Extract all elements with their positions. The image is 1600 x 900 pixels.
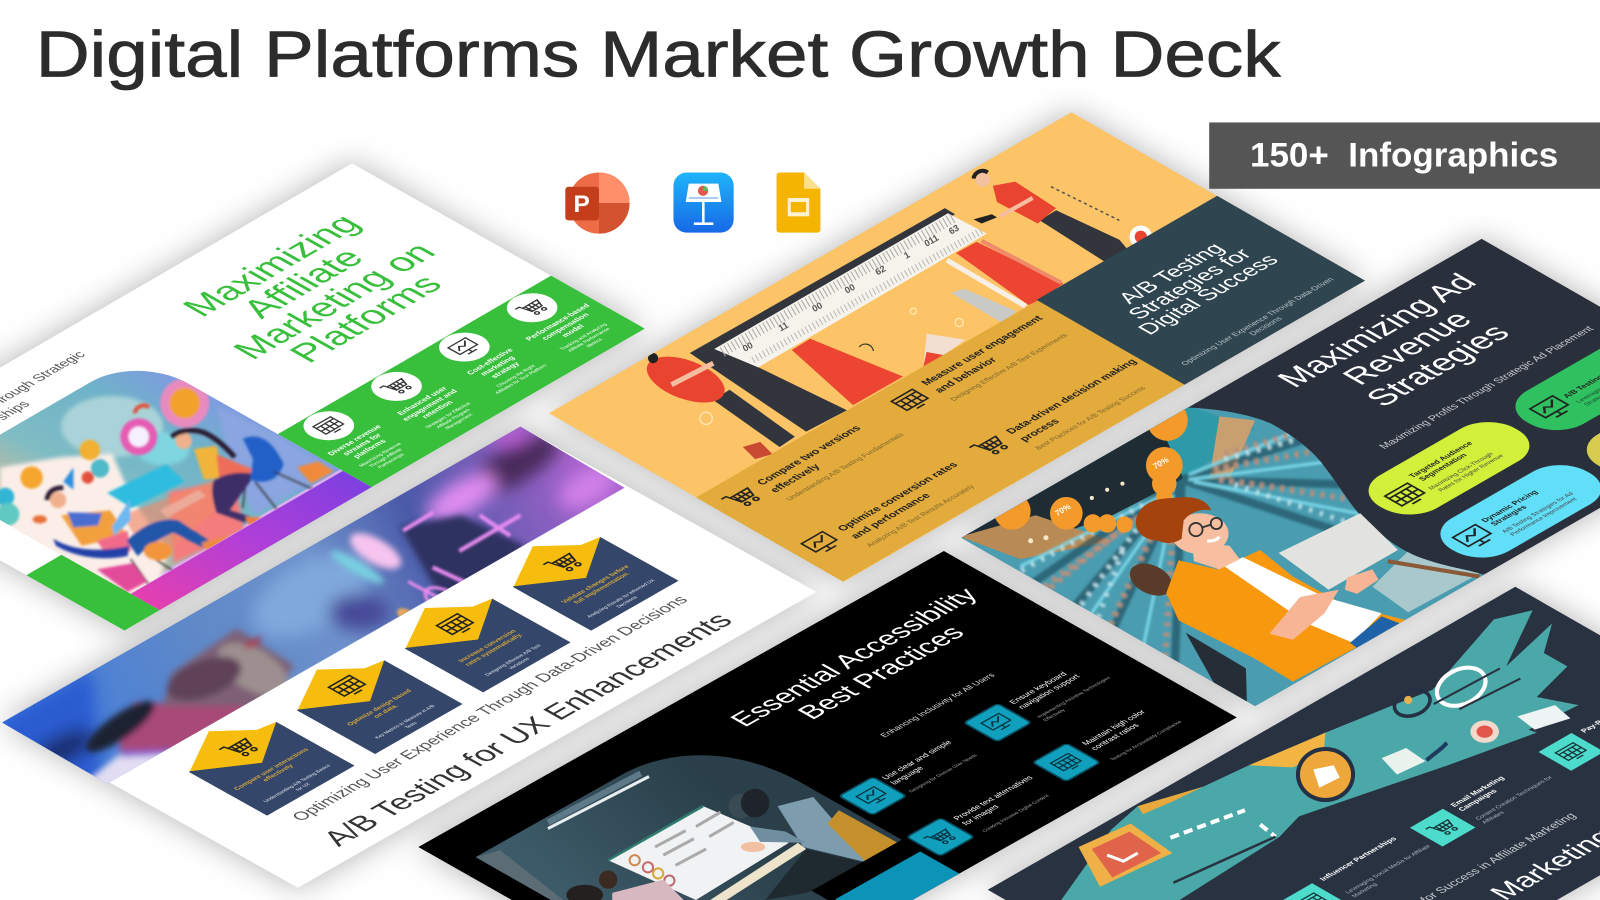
slide text and icons (1277, 704, 1600, 900)
heading: Affiliate (233, 243, 373, 323)
card: performance-based: Performance-based (523, 302, 592, 342)
pill: dynamic pricing: Strategies (1488, 504, 1530, 527)
teal corner block (835, 851, 959, 900)
heading: Platforms (280, 269, 451, 368)
ruler and figures illustration: 62 (874, 263, 887, 277)
item: email marketing (1408, 761, 1561, 848)
heading: Digital Success (1132, 251, 1284, 338)
slide background (2, 427, 816, 888)
card: performance-based: Metrics (585, 337, 605, 349)
panel: Maximizing Ad Revenue slide (949, 239, 1600, 714)
item: data-driven decisions: Best Practices for A/B Testing Success (1033, 385, 1148, 451)
card: diverse revenue: streams for (340, 432, 384, 457)
item: alt text: for images (960, 803, 1001, 827)
pill: targeted audience: Maximizing Click-Through (1427, 451, 1496, 491)
ruler and figures illustration: 00 (843, 282, 857, 296)
item: measure engagement: Measure user engagement (919, 314, 1046, 387)
item: keyboard navigation: Ensure keyboard (1007, 671, 1069, 705)
item: influencer partnerships: Influencer Partnerships (1318, 835, 1399, 882)
heading: Maximizing Ad (1269, 268, 1484, 392)
pill: yellow (1586, 433, 1600, 466)
pill: targeted audience: Targeted Audience (1407, 440, 1475, 479)
card: enhanced engagement: Strategies for Effective (424, 401, 473, 430)
card: performance-based: Affiliate Performance (567, 327, 612, 353)
item: optimize conversion: and performance (848, 491, 934, 541)
ruler and figures illustration (641, 171, 1152, 459)
card 1: Understanding A/B Testing Basics (262, 764, 333, 804)
lanterns (994, 400, 1188, 533)
photo: warehouse background (961, 408, 1484, 706)
item: compare versions: Understanding A/B Testing Fundamentals (783, 431, 906, 502)
teal brush illustration (1061, 610, 1579, 900)
card 3: rates systematically. (464, 632, 525, 667)
item: compare versions (720, 426, 904, 506)
right figure (1040, 210, 1126, 262)
card 3: Variations (507, 657, 532, 671)
icon: PowerPoint: P (573, 191, 590, 218)
slide panels and text (695, 196, 1365, 582)
lanterns: 70% (1152, 455, 1171, 471)
card: enhanced engagement (371, 372, 473, 430)
panel: A/B Testing Strategies slide (549, 112, 1365, 582)
photo: shelves converging (1019, 432, 1359, 663)
pill: dynamic pricing: Dynamic Pricing (1479, 489, 1540, 524)
card 4: full implementation. (572, 571, 632, 605)
item: email marketing: Affiliates (1481, 811, 1506, 825)
pill: targeted audience (1368, 422, 1530, 514)
card: cost-effective (439, 332, 547, 394)
card 2: Optimize design based (346, 688, 414, 727)
heading: Maximizing (174, 209, 369, 322)
card: diverse revenue: Through Affiliate (368, 447, 404, 468)
item: influencer partnerships (1277, 829, 1440, 900)
item: clear language: language (889, 765, 926, 786)
title: Digital Platforms Market Growth Deck (36, 18, 1281, 91)
slide background (988, 587, 1600, 900)
photo: man looking at neon screens (0, 418, 633, 867)
item: alt text: Creating Inclusive Digital Content (981, 794, 1052, 833)
heading: Strategies (1357, 319, 1517, 411)
card: cost-effective: Affiliates for Your Platform (494, 363, 549, 395)
pill: dynamic pricing (1440, 465, 1600, 558)
item: keyboard navigation (964, 659, 1119, 746)
card 1: for UX (295, 782, 313, 792)
card: cost-effective: Choosing the Right (495, 364, 538, 388)
pill: targeted audience: Segmentation (1417, 452, 1469, 482)
item: measure engagement: Designing Effective A/B Test Experiments (948, 332, 1070, 402)
card: enhanced engagement: Management (444, 413, 475, 431)
card: diverse revenue: Maximizing Revenue (358, 442, 403, 468)
item: data-driven decisions: process (1017, 417, 1063, 443)
item: optimize conversion (800, 463, 974, 553)
card: enhanced engagement: Enhanced user (395, 385, 449, 416)
heading: Strategies for (1122, 245, 1257, 323)
item: clear language (839, 736, 980, 816)
slide flat panels (0, 163, 645, 631)
item: compare versions: Compare two versions (754, 424, 864, 487)
item: clear language: Use clear and simple (880, 739, 954, 781)
ruler and figures illustration: 00 (741, 340, 755, 354)
card: enhanced engagement: engagement and (400, 388, 460, 422)
item: influencer partnerships: Marketing (1351, 882, 1379, 899)
card: cost-effective: strategy (488, 360, 522, 380)
slide flat panels (961, 239, 1600, 706)
card 2: Tests (404, 721, 419, 730)
card: diverse revenue: platforms (351, 438, 388, 459)
item: alt text (907, 772, 1059, 858)
card: performance-based: compensation (539, 311, 591, 341)
card 1 (188, 722, 354, 816)
photo: meeting around a board (408, 735, 980, 900)
item: influencer partnerships: Leveraging Social Media for Affiliate (1345, 844, 1433, 895)
panel: Essential Accessibility slide (408, 551, 1237, 900)
item: email marketing: Campaigns (1456, 788, 1499, 813)
card 1: effectively (261, 763, 296, 783)
pill: A/B testing (1516, 348, 1600, 430)
item: contrast ratios: contrast ratios (1089, 722, 1141, 752)
man with tablet (1136, 497, 1407, 704)
ruler and figures illustration: 63 (947, 223, 961, 236)
heading: Best Practices (790, 621, 971, 723)
photo: ceiling and side structures (960, 406, 1480, 612)
card: performance-based: Tracking and Analyzing (559, 322, 609, 351)
item: optimize conversion: Optimize conversion rates (835, 461, 961, 533)
card: performance-based (506, 293, 610, 352)
ruler and figures illustration: 11 (777, 320, 790, 333)
card: cost-effective: Cost-effective (464, 347, 515, 376)
pill: dynamic pricing: A/B Testing Strategies for Ad (1501, 491, 1576, 534)
item: data-driven decisions: Data-driven decision making (1004, 357, 1140, 436)
subheading: Optimizing User Experience Through Data-Driven (1179, 276, 1336, 367)
illustration: two people working (0, 379, 334, 602)
item: keyboard navigation: navigation support (1016, 673, 1083, 710)
pill: targeted audience: Rates for Higher Revenue (1437, 453, 1506, 493)
ruler and figures illustration: 011 (923, 233, 940, 249)
heading: A/B Testing (1112, 239, 1230, 307)
card: enhanced engagement: Affiliate Program (435, 408, 472, 429)
subheading: Enhancing Inclusivity for All Users (878, 672, 997, 739)
icon: Google Slides (777, 172, 820, 233)
card: diverse revenue (304, 411, 404, 468)
heading: Revenue (1334, 306, 1480, 390)
card: cost-effective: marketing (478, 354, 517, 377)
item: measure engagement: and behavior (932, 356, 1000, 395)
item: email marketing: Content Creation Techniques for (1475, 775, 1555, 821)
card 4: Decisions (615, 595, 640, 609)
item: compare versions: effectively (768, 462, 823, 494)
icon: Keynote (673, 172, 734, 233)
left figure (713, 390, 795, 447)
badge: 150+ Infographics: 150+ Infographics (1250, 136, 1558, 174)
subheading: Maximizing Profits Through Strategic Ad Placement (1377, 325, 1597, 451)
card 2: Key Metrics to Measure in A/B (374, 704, 437, 740)
card: enhanced engagement: retention (419, 399, 455, 420)
panel: Affiliate Marketing slide (988, 587, 1600, 900)
card: performance-based: model (559, 323, 586, 338)
subheading: Optimizing User Experience Through Data-Driven Decisions (288, 593, 692, 824)
item: contrast ratios (1033, 700, 1184, 785)
slide background (418, 551, 1237, 900)
card 4 (512, 537, 678, 631)
card 4: Validate changes before (560, 564, 631, 605)
heading: Essential Accessibility (723, 583, 984, 731)
pill: dynamic pricing: Performance Improvement (1509, 497, 1579, 537)
panel: Maximizing Affiliate Marketing slide (0, 163, 645, 631)
item: keyboard navigation: Effectively (1042, 708, 1068, 722)
heading: Marketing on (224, 237, 444, 365)
panel: A/B Testing for UX slide (0, 418, 816, 888)
lanterns: 70% (1054, 502, 1073, 518)
icon: PowerPoint (565, 172, 630, 234)
card 3: Designing Effective A/B Test (484, 643, 543, 677)
item: pay-per-click (1538, 704, 1600, 771)
item: email marketing: Email Marketing (1448, 775, 1507, 808)
card 3: Increase conversion (457, 629, 518, 663)
card 2: on data. (372, 703, 400, 719)
subheading: Decisions (1247, 315, 1284, 337)
slide text and icons (617, 583, 1215, 900)
card 4: Analyzing Results for Informed UX (586, 578, 657, 619)
card 1: Compare user interactions (233, 747, 311, 792)
item: data-driven decisions (968, 359, 1146, 454)
card: diverse revenue: Diverse revenue (325, 423, 383, 457)
badge: 150+ Infographics (1209, 122, 1600, 189)
ruler and figures illustration: 00 (810, 300, 824, 314)
slide text and cards (188, 537, 731, 848)
heading: A/B Testing for UX Enhancements (316, 609, 740, 851)
item: alt text: Provide text alternatives (951, 774, 1035, 822)
card 3 (404, 598, 570, 692)
card: diverse revenue: Partnerships (377, 452, 407, 470)
item: measure engagement (890, 316, 1068, 412)
item: optimize conversion: Analyzing A/B Test Results Accurately (864, 483, 977, 548)
ruler and figures illustration: 1 (902, 250, 912, 261)
item: contrast ratios: Testing for Accessibility Compliance (1109, 720, 1184, 762)
card 2 (296, 660, 462, 754)
item: keyboard navigation: Implementing Assistive Technologies (1036, 676, 1113, 719)
item: clear language: Designing for Diverse User Needs (908, 753, 980, 794)
item: contrast ratios: Maintain high color (1080, 709, 1148, 747)
slide background (549, 112, 1364, 582)
